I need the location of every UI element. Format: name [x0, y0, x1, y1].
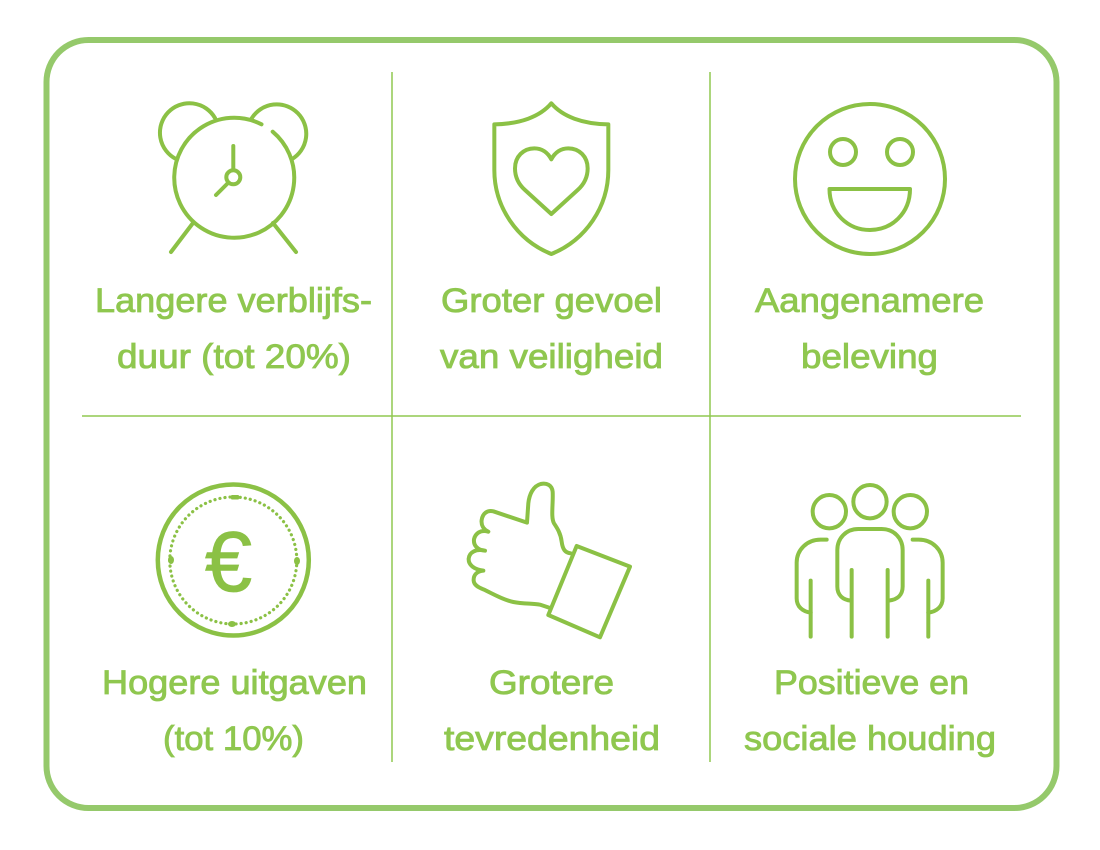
label: Langere verblijfsduur: duur (tot 20%) — [117, 338, 351, 376]
label: Positieve en sociale houding — [744, 664, 996, 758]
icon: shield with heart — [494, 103, 608, 254]
icon: group of people — [797, 485, 943, 637]
label: Positieve en sociale houding: Positieve en — [774, 664, 969, 702]
label: Langere verblijfsduur: Langere verblijfs- — [95, 282, 372, 320]
label: Grotere tevredenheid: Grotere — [489, 664, 614, 702]
label: Aangenamere beleving: beleving — [801, 338, 938, 376]
label: Positieve en sociale houding: sociale houding — [744, 720, 996, 758]
icon: euro coin — [158, 484, 309, 636]
label: Aangenamere beleving: Aangenamere — [755, 282, 984, 320]
icon: smiley — [795, 104, 945, 254]
icon: alarm clock — [160, 103, 306, 252]
icon: thumbs up — [469, 484, 630, 637]
label: Aangenamere beleving — [755, 282, 984, 376]
label: Grotere tevredenheid — [444, 664, 660, 758]
label: Grotere tevredenheid: tevredenheid — [444, 720, 660, 758]
label: Hogere uitgaven: Hogere uitgaven — [102, 664, 367, 702]
label: Groter gevoel van veiligheid: van veiligheid — [440, 338, 663, 376]
icon: euro coin: € — [205, 515, 252, 610]
label: Hogere uitgaven — [102, 664, 367, 758]
label: Hogere uitgaven: (tot 10%) — [163, 720, 304, 758]
label: Groter gevoel van veiligheid: Groter gevoel — [441, 282, 662, 320]
label: Groter gevoel van veiligheid — [440, 282, 663, 376]
label: Langere verblijfsduur — [95, 282, 372, 376]
